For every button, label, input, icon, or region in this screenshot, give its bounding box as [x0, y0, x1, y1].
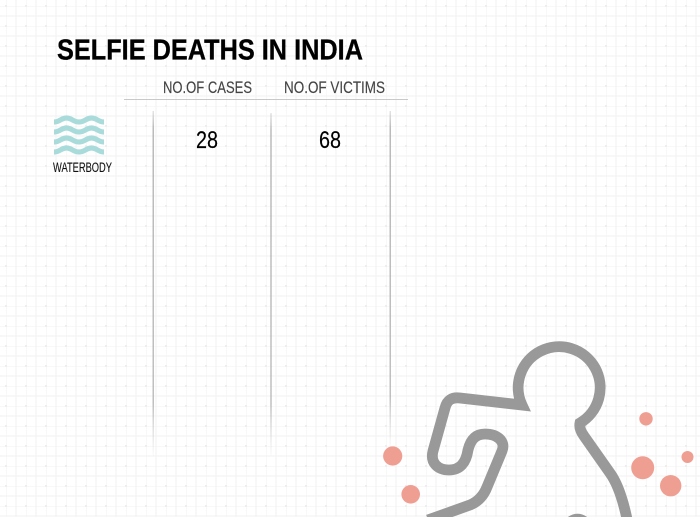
table header — [124, 78, 408, 100]
column dividers — [153, 111, 391, 456]
blood spots — [383, 412, 694, 504]
column heading: victims: NO.OF VICTIMS — [284, 78, 385, 97]
icon: chalk body outline — [428, 347, 627, 517]
column heading: cases: NO.OF CASES — [163, 78, 252, 97]
icon: water waves — [54, 118, 104, 152]
value: cases: 28 — [196, 127, 218, 154]
title: SELFIE DEATHS IN INDIA — [57, 34, 363, 66]
label: waterbody: WATERBODY — [53, 160, 112, 175]
value: victims: 68 — [319, 127, 341, 154]
